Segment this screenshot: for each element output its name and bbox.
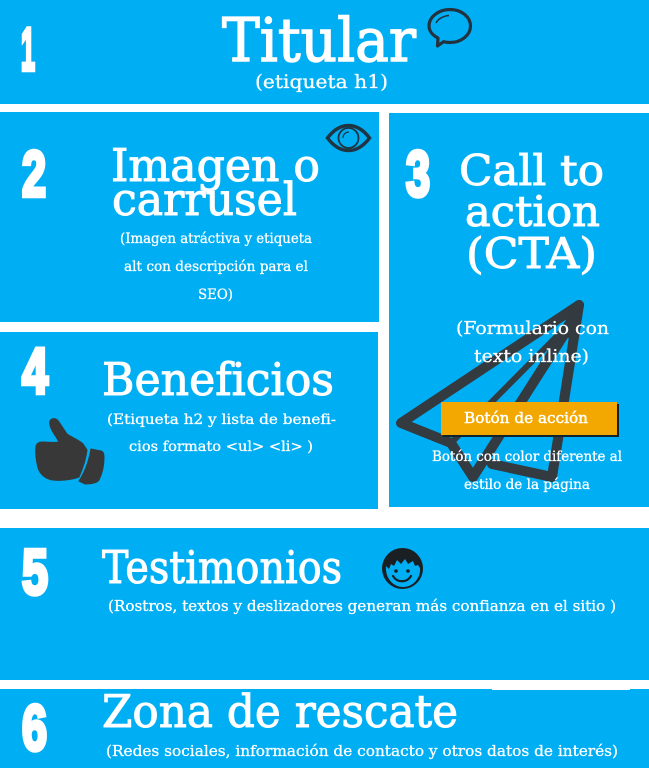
heading: Titular: Titular — [222, 6, 416, 76]
number 6: 6 — [22, 692, 47, 764]
button: botón de acción — [441, 402, 619, 437]
panel 1: titular: 1 — [21, 16, 35, 83]
panel 4: beneficios — [0, 332, 378, 509]
number 4: 4 — [22, 335, 48, 407]
panel 5: testimonios — [0, 528, 649, 680]
panel 6: zona de rescate — [0, 685, 649, 768]
panel 1: titular — [0, 0, 649, 104]
description: zona de rescate: (Redes sociales, información de contacto y otros datos de interés) — [106, 742, 618, 760]
description: imagen: (Imagen atráctiva y etiqueta — [120, 231, 312, 247]
heading: call to action: action — [465, 187, 600, 236]
icon: eye — [328, 126, 370, 150]
panel 3: call to action — [389, 113, 649, 507]
icon: thumbs up — [36, 419, 104, 484]
description: imagen: SEO) — [198, 287, 233, 303]
number 2: 2 — [22, 138, 46, 210]
description: beneficios: (Etiqueta h2 y lista de benefi- — [107, 412, 336, 428]
description: formulario: (Formulario con — [456, 318, 609, 339]
panel 2: imagen o carrusel — [0, 112, 379, 322]
description: formulario — [456, 318, 609, 367]
icon: paper plane — [401, 305, 579, 477]
description: beneficios — [107, 412, 336, 455]
number 3: 3 — [406, 138, 430, 210]
button note: estilo de la página — [464, 477, 590, 493]
heading: Zona de rescate: Zona de rescate — [102, 685, 458, 738]
button note: Botón con color diferente al — [432, 449, 622, 465]
description: testimonios: (Rostros, textos y deslizadores generan más confianza en el sitio ) — [108, 597, 616, 615]
heading: Imagen o carrusel: carrusel — [112, 173, 297, 226]
heading: call to action — [459, 146, 604, 278]
icon: speech bubble — [429, 10, 470, 46]
description: beneficios: cios formato <ul> <li> ) — [129, 439, 313, 455]
description: imagen: alt con descripción para el — [124, 259, 308, 275]
heading: call to action: Call to — [459, 146, 604, 195]
description: formulario: texto inline) — [474, 346, 589, 367]
button note — [432, 449, 622, 493]
description: imagen — [120, 231, 312, 303]
number 5: 5 — [22, 536, 48, 608]
icon: smiling face — [382, 548, 423, 589]
heading: Imagen o carrusel: Imagen o — [111, 139, 320, 192]
button: botón de acción: Botón de acción — [464, 409, 588, 427]
subtitle: etiqueta h1: (etiqueta h1) — [255, 71, 388, 93]
heading: Beneficios: Beneficios — [102, 353, 334, 406]
heading: Testimonios: Testimonios — [102, 541, 342, 594]
heading: Imagen o carrusel — [111, 139, 320, 226]
heading: call to action: (CTA) — [466, 229, 597, 278]
